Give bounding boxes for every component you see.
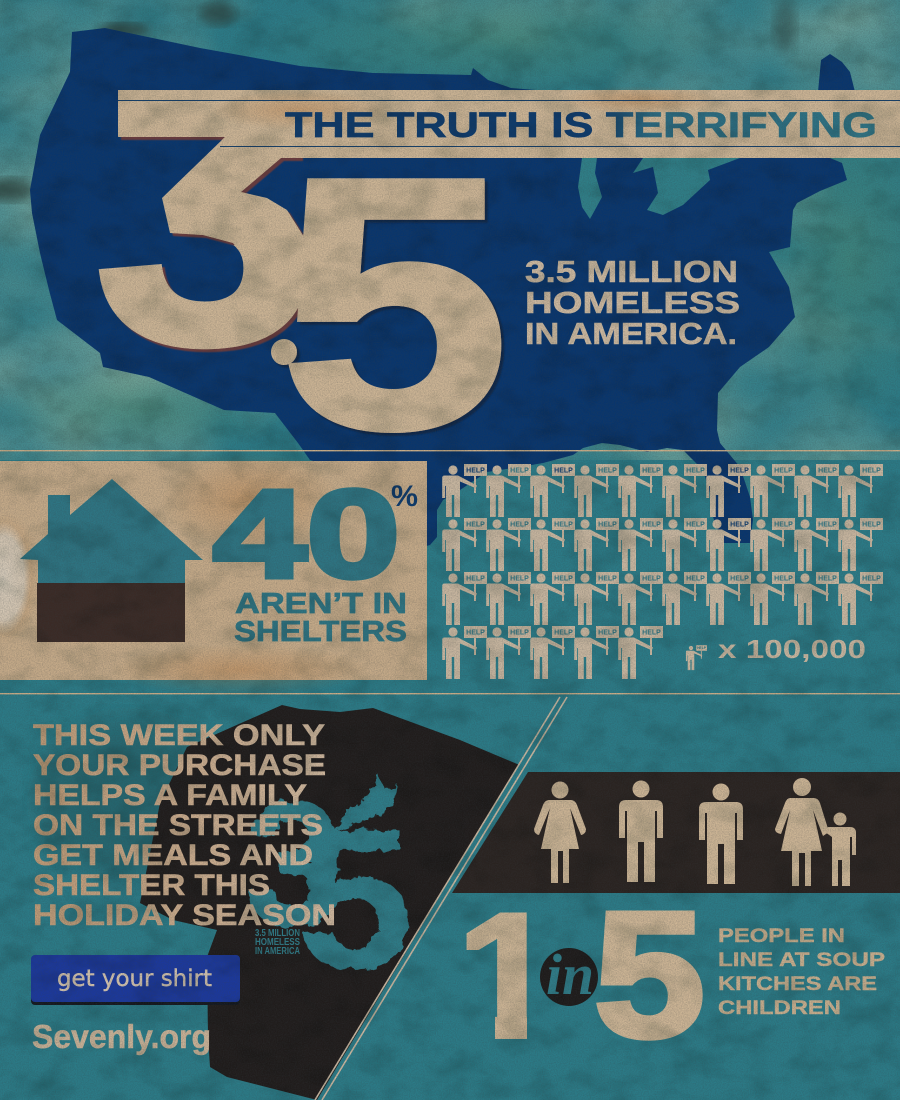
text: 3.5 million homeless in america: HOMELESS bbox=[525, 285, 740, 320]
shirt graphic: distressed 3.5: 5 bbox=[297, 788, 414, 1011]
text: people in line at soup kitchens: LINE AT SOUP bbox=[718, 950, 885, 971]
pictogram: help figures: HELP bbox=[774, 576, 793, 583]
button: get your shirt bbox=[31, 955, 240, 1005]
pictogram: help figures: HELP bbox=[730, 576, 749, 583]
pictogram: help figures bbox=[442, 464, 883, 679]
pictogram: help figures: HELP bbox=[554, 576, 573, 583]
text: promo message: SHELTER THIS bbox=[33, 869, 270, 902]
map: United States bbox=[30, 28, 855, 548]
pictogram: help figures: HELP bbox=[686, 522, 705, 529]
badge: in: in bbox=[546, 942, 594, 1007]
pictogram: help figures: HELP bbox=[510, 522, 529, 529]
shirt small print: IN AMERICA bbox=[255, 946, 300, 957]
text: promo message: ON THE STREETS bbox=[33, 809, 323, 842]
text: aren't in shelters bbox=[234, 588, 407, 648]
pictogram: help figures: HELP bbox=[554, 468, 573, 475]
pictogram: help figures: HELP bbox=[554, 630, 573, 637]
stat: 1 in 5 bbox=[466, 910, 703, 1041]
shirt graphic: distressed 3.5: 3 bbox=[244, 764, 343, 963]
pictogram: help figures: HELP bbox=[774, 468, 793, 475]
text: people in line at soup kitchens: KITCHES ARE bbox=[718, 974, 877, 995]
shirt small print: HOMELESS bbox=[255, 937, 300, 948]
pictogram: help figures: HELP bbox=[510, 468, 529, 475]
shirt small print bbox=[255, 929, 300, 954]
pictogram: help figures: HELP bbox=[818, 522, 837, 529]
shirt graphic: distressed 3.5 bbox=[248, 774, 410, 971]
pictogram: help figures: HELP bbox=[598, 522, 617, 529]
legend: one figure equals 100,000: x 100,000 bbox=[718, 634, 866, 664]
text: promo message: HELPS A FAMILY bbox=[33, 779, 307, 812]
pictogram: help figures: HELP bbox=[598, 630, 617, 637]
legend: one figure equals 100,000 bbox=[686, 634, 866, 670]
text: 3.5 million homeless in america: 3.5 MILLION bbox=[525, 254, 738, 289]
number 3 with banner tail bbox=[98, 90, 304, 353]
text: promo message: GET MEALS AND bbox=[33, 839, 313, 872]
pictogram: help figures: HELP bbox=[686, 576, 705, 583]
text: people in line at soup kitchens: PEOPLE IN bbox=[718, 926, 845, 947]
text: promo message bbox=[33, 719, 336, 932]
pictogram: help figures: HELP bbox=[466, 576, 485, 583]
text: people in line at soup kitchens bbox=[718, 926, 885, 1019]
digit 5: 5 bbox=[594, 876, 705, 1075]
text: 3.5 million homeless in america bbox=[525, 254, 740, 351]
legend: one figure equals 100,000: HELP bbox=[697, 646, 707, 650]
pictogram: help figures: HELP bbox=[818, 468, 837, 475]
button: get your shirt: get your shirt bbox=[57, 966, 212, 992]
t-shirt bbox=[140, 705, 560, 1100]
icon: woman bbox=[534, 782, 586, 883]
band: people silhouettes bbox=[452, 772, 900, 893]
percent sign: % bbox=[391, 480, 418, 513]
big number dot and 5: 5 bbox=[279, 104, 510, 504]
icon: house bbox=[20, 479, 203, 642]
pictogram: help figures: HELP bbox=[642, 468, 661, 475]
pictogram: help figures: HELP bbox=[598, 576, 617, 583]
text: sevenly.org: Sevenly.org bbox=[32, 1018, 211, 1055]
digit 1: 1 bbox=[456, 877, 559, 1075]
text: promo message: THIS WEEK ONLY bbox=[33, 719, 325, 752]
stat: 40: 40 bbox=[213, 465, 400, 604]
pictogram: help figures: HELP bbox=[510, 630, 529, 637]
icon: man bbox=[619, 780, 663, 882]
shirt small print: 3.5 MILLION bbox=[255, 928, 300, 939]
diagonal double rule bbox=[315, 697, 567, 1100]
pictogram: help figures: HELP bbox=[466, 522, 485, 529]
icon: man bbox=[699, 784, 743, 884]
pictogram: help figures: HELP bbox=[466, 468, 485, 475]
pictogram: help figures: HELP bbox=[686, 468, 705, 475]
text: 3.5 million homeless in america: IN AMERICA. bbox=[525, 316, 737, 351]
banner: the truth is terrifying bbox=[93, 3, 900, 422]
number 3 with banner tail: 3 bbox=[93, 3, 318, 422]
pictogram: help figures: HELP bbox=[598, 468, 617, 475]
pictogram: help figures: HELP bbox=[774, 522, 793, 529]
great lakes bbox=[578, 158, 740, 219]
pictogram: help figures: HELP bbox=[642, 522, 661, 529]
pictogram: help figures: HELP bbox=[554, 522, 573, 529]
pictogram: help figures: HELP bbox=[730, 468, 749, 475]
icon: woman holding child's hand bbox=[775, 778, 856, 886]
pictogram: help figures: HELP bbox=[818, 576, 837, 583]
pictogram: help figures: HELP bbox=[642, 630, 661, 637]
title: THE TRUTH IS TERRIFYING bbox=[285, 106, 877, 145]
pictogram: help figures: HELP bbox=[642, 576, 661, 583]
text: people in line at soup kitchens: CHILDREN bbox=[718, 998, 841, 1019]
pictogram: help figures: HELP bbox=[510, 576, 529, 583]
pictogram: help figures: HELP bbox=[466, 630, 485, 637]
text: promo message: YOUR PURCHASE bbox=[33, 749, 326, 782]
text: aren't in shelters: AREN’T IN bbox=[235, 588, 407, 620]
pictogram: help figures: HELP bbox=[730, 522, 749, 529]
panel: 40 percent not in shelters bbox=[0, 450, 427, 696]
pictogram: help figures: HELP bbox=[862, 522, 881, 529]
text: promo message: HOLIDAY SEASON bbox=[33, 899, 336, 932]
pictogram: help figures: HELP bbox=[862, 576, 881, 583]
pictogram: help figures: HELP bbox=[862, 468, 881, 475]
text: aren't in shelters: SHELTERS bbox=[234, 616, 407, 648]
